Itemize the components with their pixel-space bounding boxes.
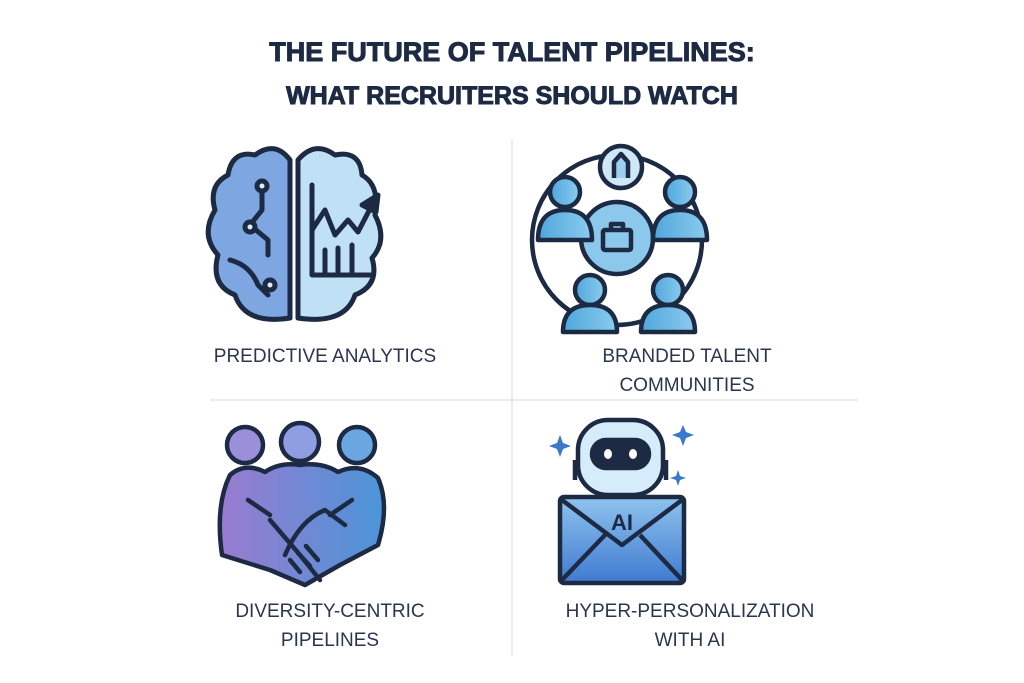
title: THE FUTURE OF TALENT PIPELINES: [269, 37, 755, 67]
label: branded talent communities [602, 346, 772, 396]
label: diversity-centric pipelines [235, 601, 425, 651]
label: branded talent communities: BRANDED TALENT [602, 346, 772, 367]
label: predictive analytics: PREDICTIVE ANALYTICS [214, 346, 436, 367]
label: diversity-centric pipelines: DIVERSITY-CENTRIC [235, 601, 425, 622]
icon: sparkles [549, 425, 694, 486]
icon: handshake diversity [220, 423, 384, 585]
label: diversity-centric pipelines: PIPELINES [281, 630, 379, 651]
label: hyper-personalization with ai: HYPER-PERSONALIZATION [566, 601, 814, 622]
label: branded talent communities: COMMUNITIES [619, 375, 755, 396]
label: hyper-personalization with ai: WITH AI [655, 630, 725, 651]
icon: brain with chart [208, 149, 381, 319]
title: WHAT RECRUITERS SHOULD WATCH [286, 82, 738, 110]
icon: AI robot with envelope [560, 420, 684, 583]
icon: AI robot with envelope: AI [611, 510, 633, 535]
label: hyper-personalization with ai [566, 601, 814, 651]
icon: talent community network [532, 146, 707, 332]
title [269, 37, 755, 110]
